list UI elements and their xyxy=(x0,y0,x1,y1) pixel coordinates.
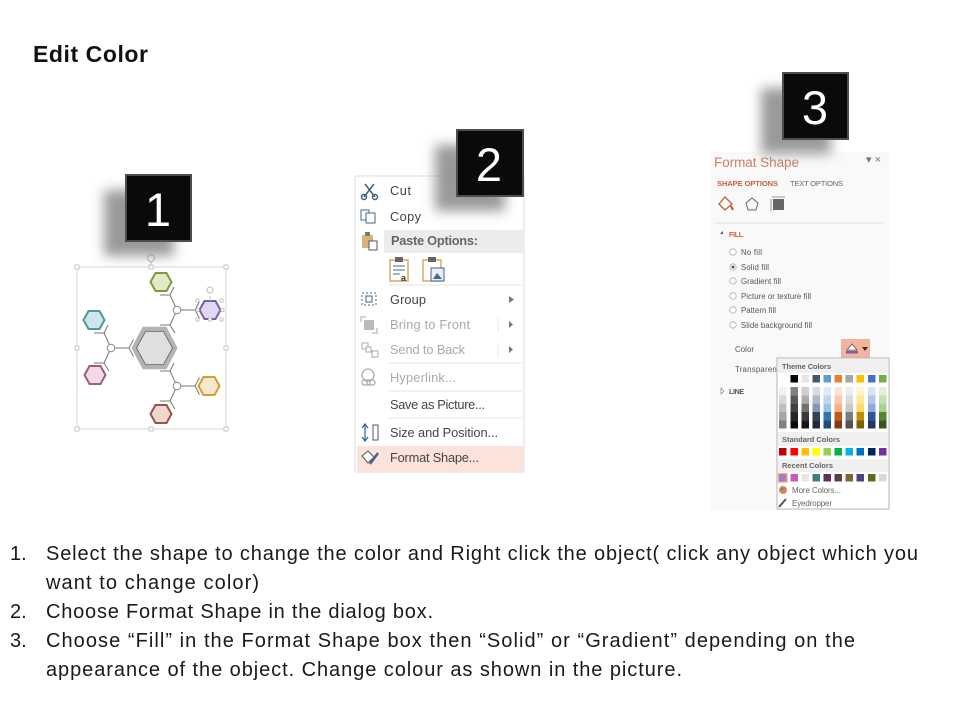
menu labels: Group xyxy=(390,292,426,307)
line section heading: LINE xyxy=(729,389,744,396)
fill radio options: Gradient fill xyxy=(741,277,781,286)
theme color shades xyxy=(779,387,886,428)
badge 2: 2 xyxy=(476,138,502,191)
fill radio options: Picture or texture fill xyxy=(741,292,811,301)
standard colors header xyxy=(778,432,888,446)
icon: hyperlink xyxy=(362,369,375,385)
menu separators xyxy=(389,285,522,418)
icon: group xyxy=(362,293,376,305)
format shape highlight xyxy=(357,446,523,472)
color picker dropdown xyxy=(777,358,889,509)
theme color swatches xyxy=(779,375,886,382)
line section heading xyxy=(721,388,744,396)
step 1 instruction: 1. xyxy=(10,543,27,565)
menu background xyxy=(355,176,524,472)
menu labels: Hyperlink... xyxy=(390,370,456,385)
icon: fill bucket xyxy=(719,197,733,210)
submenu dividers xyxy=(497,318,499,357)
badge 2 xyxy=(435,129,524,211)
step 2 instruction: 2. xyxy=(10,601,27,623)
hexagon: purple xyxy=(196,287,224,321)
step 1 instruction: want to change color) xyxy=(45,572,259,594)
menu labels: Paste Options: xyxy=(391,233,478,248)
step 1 instruction xyxy=(10,543,918,594)
standard colors header: Standard Colors xyxy=(782,435,840,444)
connector: left branch xyxy=(94,325,134,371)
hexagon: pink xyxy=(84,366,106,384)
panel: step 2 context menu xyxy=(355,176,524,472)
fill radio options: No fill xyxy=(741,248,762,257)
color label: Color xyxy=(735,345,754,354)
menu labels: Copy xyxy=(390,209,422,224)
selection frame xyxy=(75,254,228,431)
recent color swatches xyxy=(778,473,886,483)
title: Edit Color xyxy=(33,41,148,67)
hexagon: teal xyxy=(84,311,104,329)
instructions list xyxy=(10,543,918,681)
menu labels: Format Shape... xyxy=(390,450,479,465)
step 3 instruction xyxy=(10,630,855,681)
icon: paste picture xyxy=(423,257,444,281)
badge 1 xyxy=(104,174,192,256)
standard color swatches xyxy=(779,448,886,456)
submenu arrows xyxy=(509,296,514,353)
badge 3: 3 xyxy=(802,81,828,134)
fill radio options: Slide background fill xyxy=(741,321,812,330)
fill radio options xyxy=(730,248,812,330)
recent colors header xyxy=(778,459,888,472)
menu labels: Bring to Front xyxy=(390,317,470,332)
theme colors header: Theme Colors xyxy=(782,362,831,371)
panel: step 3 format shape pane xyxy=(710,152,890,510)
pane title: Format Shape xyxy=(714,155,799,170)
dropdown frame xyxy=(777,358,889,509)
step 3 instruction: 3. xyxy=(10,630,27,652)
hexagon: brown xyxy=(150,405,172,423)
badge 1: 1 xyxy=(145,183,171,236)
tab: text options: TEXT OPTIONS xyxy=(790,179,843,188)
step 1 instruction: Select the shape to change the color and Right click the object( click any object which you xyxy=(46,543,918,565)
hexagon: green xyxy=(150,273,172,291)
hexagon: yellow xyxy=(198,377,220,395)
menu labels: Cut xyxy=(390,183,411,198)
icon: paste keep text xyxy=(390,257,408,283)
connector: upper right branch xyxy=(160,287,200,333)
menu labels xyxy=(390,183,498,465)
more colors option: More Colors... xyxy=(792,486,841,495)
color button xyxy=(841,339,870,358)
fill section heading xyxy=(720,231,744,239)
central hexagon xyxy=(134,329,175,367)
icon: format shape xyxy=(362,451,378,464)
icon: size and position xyxy=(362,424,378,441)
badge 3 xyxy=(761,72,849,154)
eyedropper option: Eyedropper xyxy=(792,499,832,508)
fill section heading: FILL xyxy=(729,232,744,239)
icon: copy xyxy=(361,210,375,223)
theme colors header xyxy=(778,359,888,373)
step 3 instruction: Choose “Fill” in the Format Shape box then “Solid” or “Gradient” depending on the xyxy=(46,630,855,652)
pane divider xyxy=(715,222,883,224)
fill radio options: Solid fill xyxy=(741,263,769,272)
menu labels: Size and Position... xyxy=(390,425,498,440)
paste options highlight xyxy=(384,230,523,253)
step 3 instruction: appearance of the object. Change colour as shown in the picture. xyxy=(46,659,682,681)
icon: paste xyxy=(362,232,377,250)
icon: send to back xyxy=(362,343,378,357)
menu labels: Save as Picture... xyxy=(390,397,485,412)
step 2 instruction: Choose Format Shape in the dialog box. xyxy=(46,601,433,623)
transparency label: Transparency xyxy=(735,365,785,374)
menu labels: Send to Back xyxy=(390,342,466,357)
panel: step 1 shape selection xyxy=(75,254,228,431)
recent colors header: Recent Colors xyxy=(782,461,833,470)
icon: layout xyxy=(771,197,785,211)
icon: pentagon xyxy=(746,198,758,210)
pane background xyxy=(710,152,890,510)
icon: bring to front xyxy=(361,317,377,333)
pane controls: ▾ × xyxy=(866,154,881,166)
tab: shape options: SHAPE OPTIONS xyxy=(717,179,778,188)
connector: lower right branch xyxy=(160,363,200,409)
icon: paste keep text: a xyxy=(401,273,407,283)
fill radio options: Pattern fill xyxy=(741,306,776,315)
icon: scissors xyxy=(362,184,378,200)
